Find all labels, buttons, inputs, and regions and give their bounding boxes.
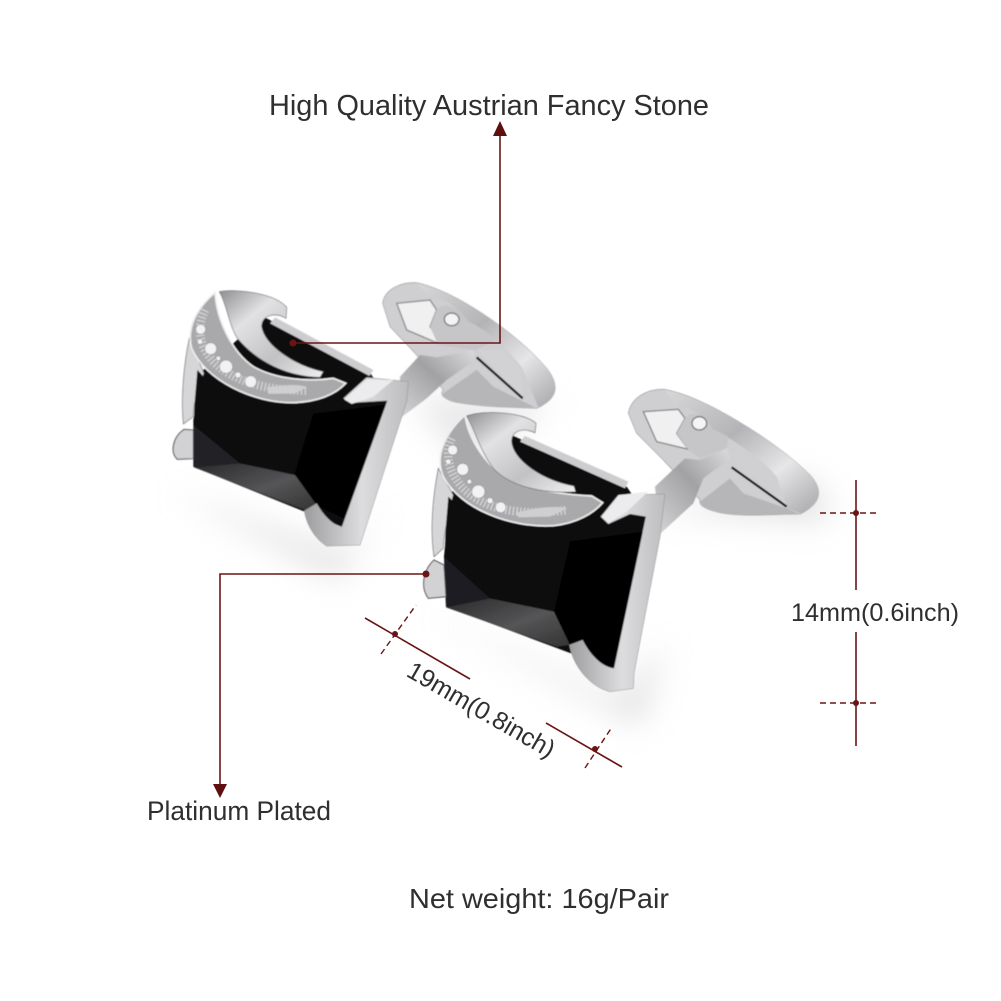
callout: stone arrow: [290, 121, 507, 346]
right pavé band: [440, 415, 603, 526]
left top rail: [270, 317, 373, 376]
dimension label: 14mm: 14mm(0.6inch): [791, 599, 959, 627]
soft shadows: [170, 395, 830, 725]
right stone: [444, 436, 646, 669]
right stem: [655, 448, 730, 534]
plating label: Platinum Plated: [147, 796, 331, 826]
right top rail: [520, 436, 628, 488]
left polished crescent: [219, 291, 323, 377]
right cufflink: [424, 389, 818, 692]
left prong: [182, 338, 204, 424]
left frame: [304, 377, 408, 546]
left back plate: [383, 283, 555, 408]
right back plate: [628, 389, 818, 515]
heading: stone label: High Quality Austrian Fancy Stone: [269, 90, 709, 122]
left pavé band: [190, 293, 346, 403]
left cufflink: [173, 283, 555, 546]
left ball: [173, 429, 193, 459]
dimension: 19mm width: [365, 605, 622, 768]
right prong: [432, 468, 453, 557]
net weight label: Net weight: 16g/Pair: [409, 883, 669, 914]
left stem: [400, 350, 475, 418]
left stone: [193, 317, 387, 527]
callout: plating arrow: [213, 570, 430, 798]
dimension: 14mm height: [820, 480, 878, 746]
right ball: [424, 560, 446, 598]
right polished crescent: [467, 413, 576, 492]
dimension label: 19mm: 19mm(0.8inch): [402, 656, 560, 764]
right frame: [569, 494, 665, 692]
